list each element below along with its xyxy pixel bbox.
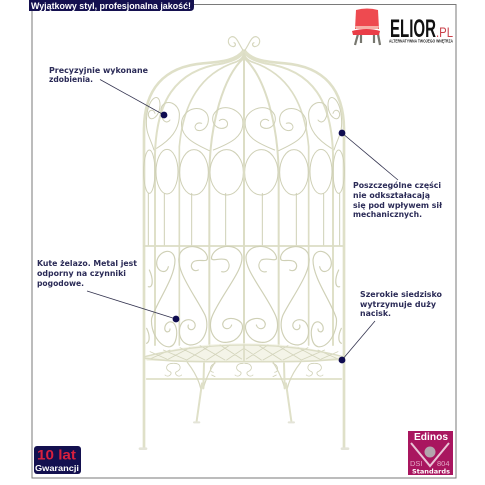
upper cage [144, 37, 344, 448]
text: się pod wpływem sił [353, 201, 443, 210]
right half mirrored [244, 246, 348, 449]
text: Poszczególne części [353, 180, 441, 190]
badge: Edinos standards [408, 431, 453, 476]
badge: Edinos standards: Edinos [414, 431, 448, 443]
text: wytrzymuje duży [360, 300, 437, 309]
badge: 10 year warranty: 10 lat [37, 446, 76, 462]
lower back, seat and legs [140, 246, 348, 449]
text [49, 66, 149, 84]
callout: wide seat [339, 290, 442, 363]
text: odporny na czynniki [37, 269, 126, 278]
badge: Edinos standards: 804 [437, 459, 450, 468]
callout: parts do not deform [339, 130, 443, 219]
text: nie odkształacają [353, 191, 430, 200]
tagline: ALTERNATYWNA TWOJEGO WNĘTRZA [389, 38, 454, 44]
badge: 10 year warranty: Gwarancji [35, 464, 79, 473]
pointer [339, 130, 398, 180]
callout: wrought iron [37, 259, 179, 322]
text: Szerokie siedzisko [360, 290, 442, 299]
left half [140, 246, 244, 449]
centre post [241, 53, 247, 345]
seat panel [145, 343, 342, 361]
title banner: Wyjątkowy styl, profesjonalna jakość! [31, 1, 191, 11]
text [353, 180, 443, 219]
text: Precyzyjnie wykonane [49, 66, 149, 75]
pointer [87, 291, 179, 322]
text: pogodowe. [37, 279, 84, 288]
text [360, 290, 442, 318]
horizontal bar [144, 243, 343, 248]
text: zdobienia. [49, 75, 93, 84]
badge: Edinos standards: Standards [412, 468, 450, 476]
callout: decorations [49, 66, 167, 118]
pointer [339, 321, 375, 363]
wordmark: ELIOR [390, 15, 436, 43]
text [37, 259, 137, 288]
text: nacisk. [360, 309, 391, 318]
pointer [100, 80, 167, 118]
logo: Elior.pl [352, 8, 454, 45]
badge: Edinos standards: DSI [410, 459, 423, 468]
left half [144, 37, 243, 448]
right half mirrored [245, 37, 344, 448]
logo: Elior.pl: .PL [436, 24, 453, 40]
text: Kute żelazo. Metal jest [37, 259, 137, 268]
illustration: garden bench [140, 37, 348, 449]
badge: 10 year warranty [34, 446, 81, 474]
text: mechanicznych. [353, 210, 422, 219]
icon: red chair [352, 8, 380, 45]
